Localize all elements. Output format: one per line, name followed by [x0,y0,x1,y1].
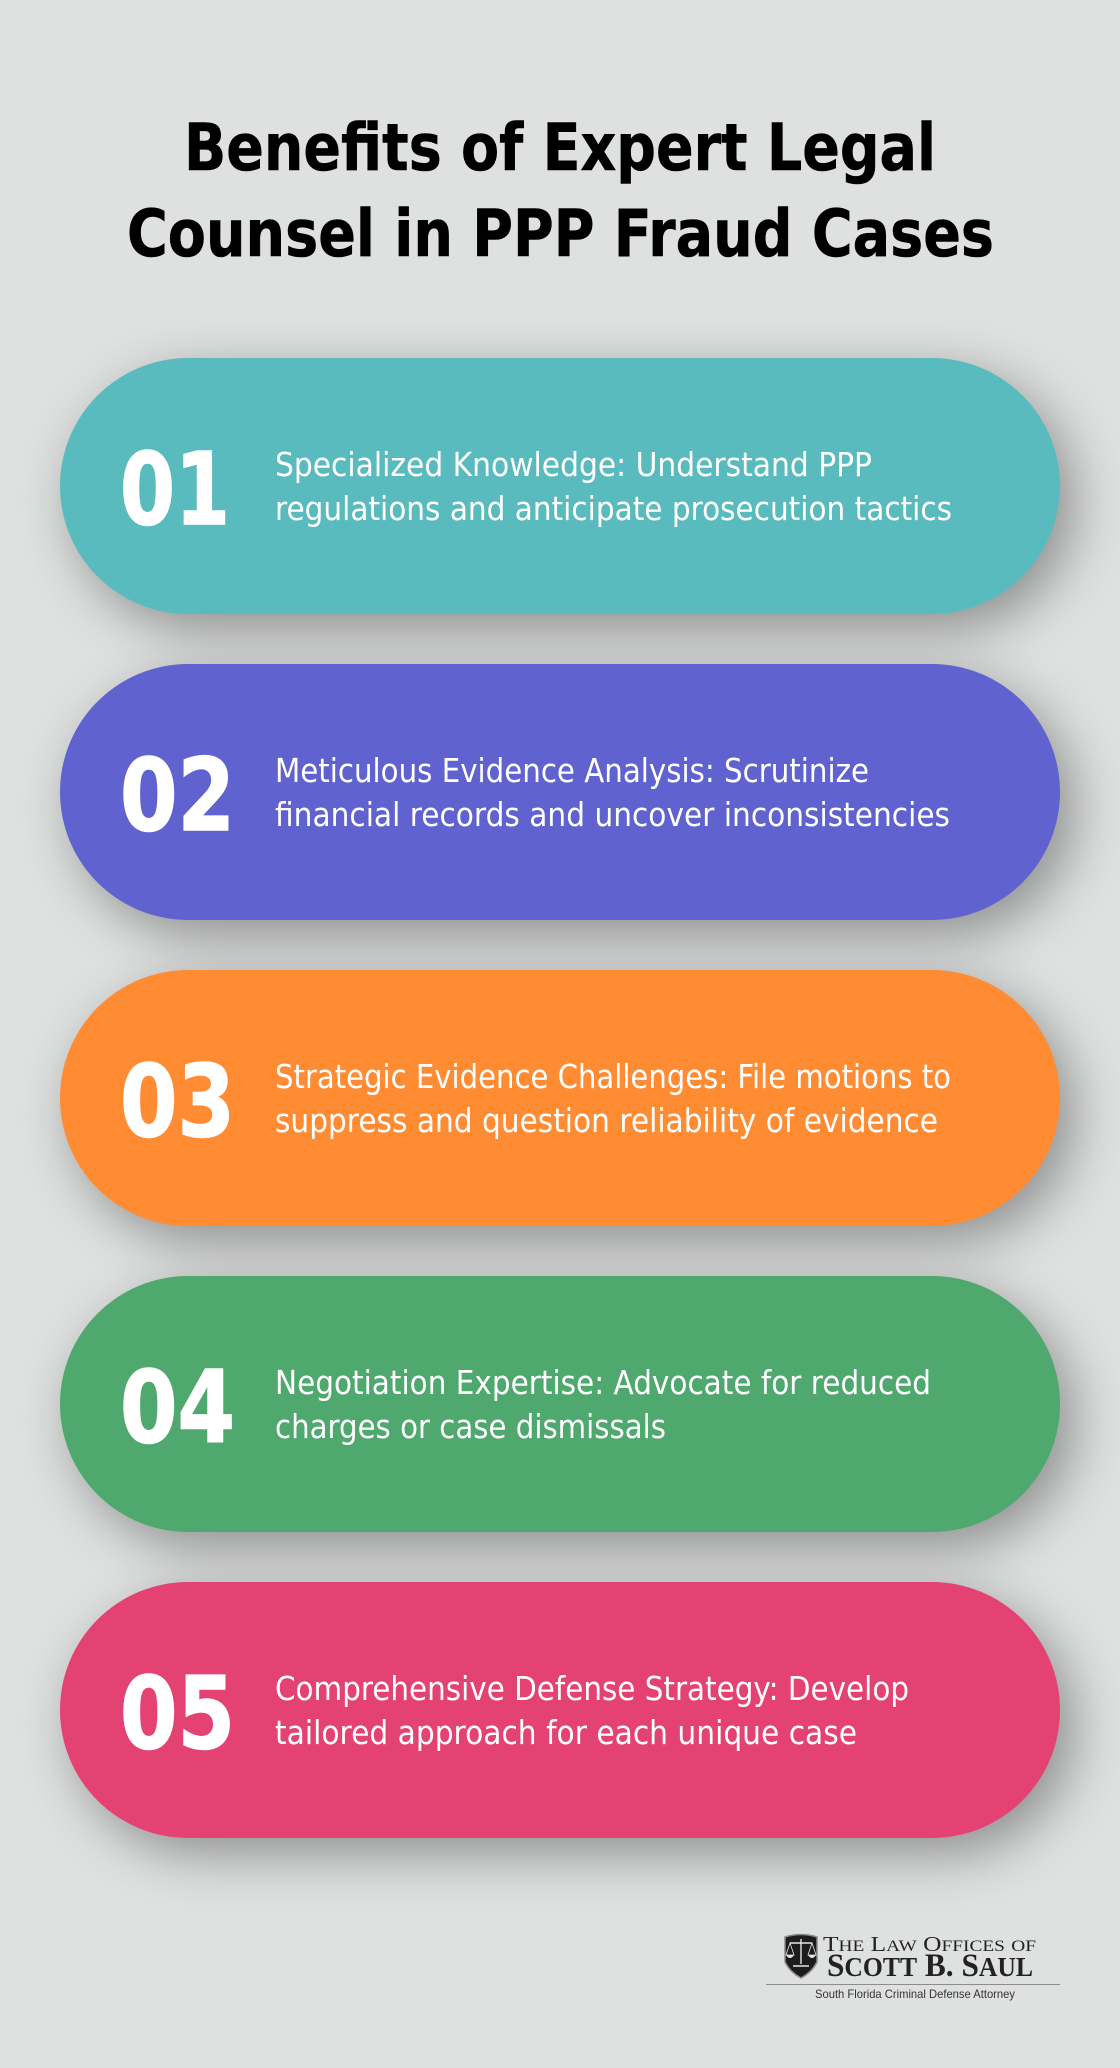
panel: 02 evidence analysis [60,664,1060,920]
number 05: 05 [120,1655,235,1772]
pill 03 [60,970,1060,1226]
panel: 05 defense strategy [60,1582,1060,1838]
pill 02 [60,664,1060,920]
text 05: Comprehensive Defense Strategy: Develop [275,1669,909,1708]
panel: 04 negotiation [60,1276,1060,1532]
panel: 01 specialized knowledge [60,358,1060,614]
text 03: Strategic Evidence Challenges: File motions to [275,1057,951,1096]
number 03: 03 [120,1043,235,1160]
logo tagline: South Florida Criminal Defense Attorney [815,1987,1015,2001]
text 05: tailored approach for each unique case [275,1713,857,1752]
text 04 [275,1363,931,1446]
text 02: Meticulous Evidence Analysis: Scrutinize [275,751,869,790]
text 04: charges or case dismissals [275,1407,666,1446]
number 02: 02 [120,737,235,854]
pill 05 [60,1582,1060,1838]
text 02 [275,751,950,834]
text 01: regulations and anticipate prosecution tactics [275,489,952,528]
pill 04 [60,1276,1060,1532]
text 02: financial records and uncover inconsistencies [275,795,950,834]
text 03: suppress and question reliability of evidence [275,1101,938,1140]
logo [766,1932,1060,2001]
number 04: 04 [120,1349,235,1466]
title: Counsel in PPP Fraud Cases [127,197,994,272]
panel: 03 evidence challenges [60,970,1060,1226]
text 01: Specialized Knowledge: Understand PPP [275,445,872,484]
title [127,111,994,272]
pill 01 [60,358,1060,614]
logo firm line 2: SCOTT B. SAUL [827,1948,1033,1984]
number 01: 01 [120,431,230,548]
logo divider [766,1984,1060,1985]
text 03 [275,1057,951,1140]
title: Benefits of Expert Legal [184,111,936,186]
text 01 [275,445,952,528]
logo firm line 1: THE LAW O FFICES OF [823,1932,1036,1956]
text 05 [275,1669,909,1752]
text 04: Negotiation Expertise: Advocate for reduced [275,1363,931,1402]
icon: shield with scales [785,1934,817,1978]
